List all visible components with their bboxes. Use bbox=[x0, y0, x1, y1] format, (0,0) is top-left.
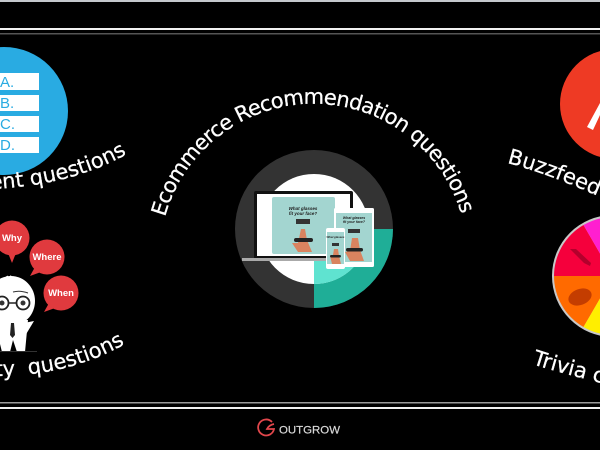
panel: ecommerce recommendation questions bbox=[150, 92, 472, 308]
icon: character with glasses bbox=[0, 276, 37, 352]
icon: buzzfeed red circle with arrow bbox=[560, 49, 600, 159]
icon: laptop: fit your face? bbox=[289, 211, 317, 216]
logo: outgrow bbox=[258, 419, 341, 436]
wordmark: outgrow: OUTGROW bbox=[279, 424, 341, 436]
panel: buzzfeed questions bbox=[508, 51, 600, 196]
panel: personality questions bbox=[0, 220, 124, 380]
icon: blue answer list bbox=[0, 47, 68, 175]
icon: blue answer list: B. bbox=[0, 95, 14, 112]
icon: outgrow mark bbox=[258, 419, 274, 435]
icon: laptop: What glasses bbox=[289, 206, 318, 211]
icon: blue answer list: A. bbox=[0, 74, 14, 91]
icon: tablet bbox=[334, 208, 374, 267]
heading: ecommerce recommendation questions: Ecommerce Recommendation questions bbox=[150, 92, 472, 216]
icon: trivia wheel bbox=[552, 215, 600, 337]
icon: tablet: fit your face? bbox=[343, 220, 366, 224]
icon: phone bbox=[326, 228, 345, 269]
icon: speech bubble where bbox=[30, 240, 64, 276]
icon: laptop bbox=[242, 191, 353, 261]
icon: speech bubble why bbox=[0, 220, 30, 263]
icon: speech bubble why: Why bbox=[2, 233, 23, 244]
icon: tablet: What glasses bbox=[343, 216, 365, 220]
icon: blue answer list: D. bbox=[0, 137, 15, 154]
icon: phone: What glasses bbox=[327, 235, 345, 239]
panel: assessment questions bbox=[0, 47, 126, 189]
panel: trivia questions bbox=[536, 216, 600, 383]
icon: speech bubble when: When bbox=[48, 288, 74, 299]
icon: speech bubble where: Where bbox=[32, 252, 62, 263]
icon: ring with white and teal quadrants bbox=[235, 150, 393, 308]
icon: speech bubble when bbox=[44, 276, 78, 312]
icon: blue answer list: C. bbox=[0, 116, 15, 133]
